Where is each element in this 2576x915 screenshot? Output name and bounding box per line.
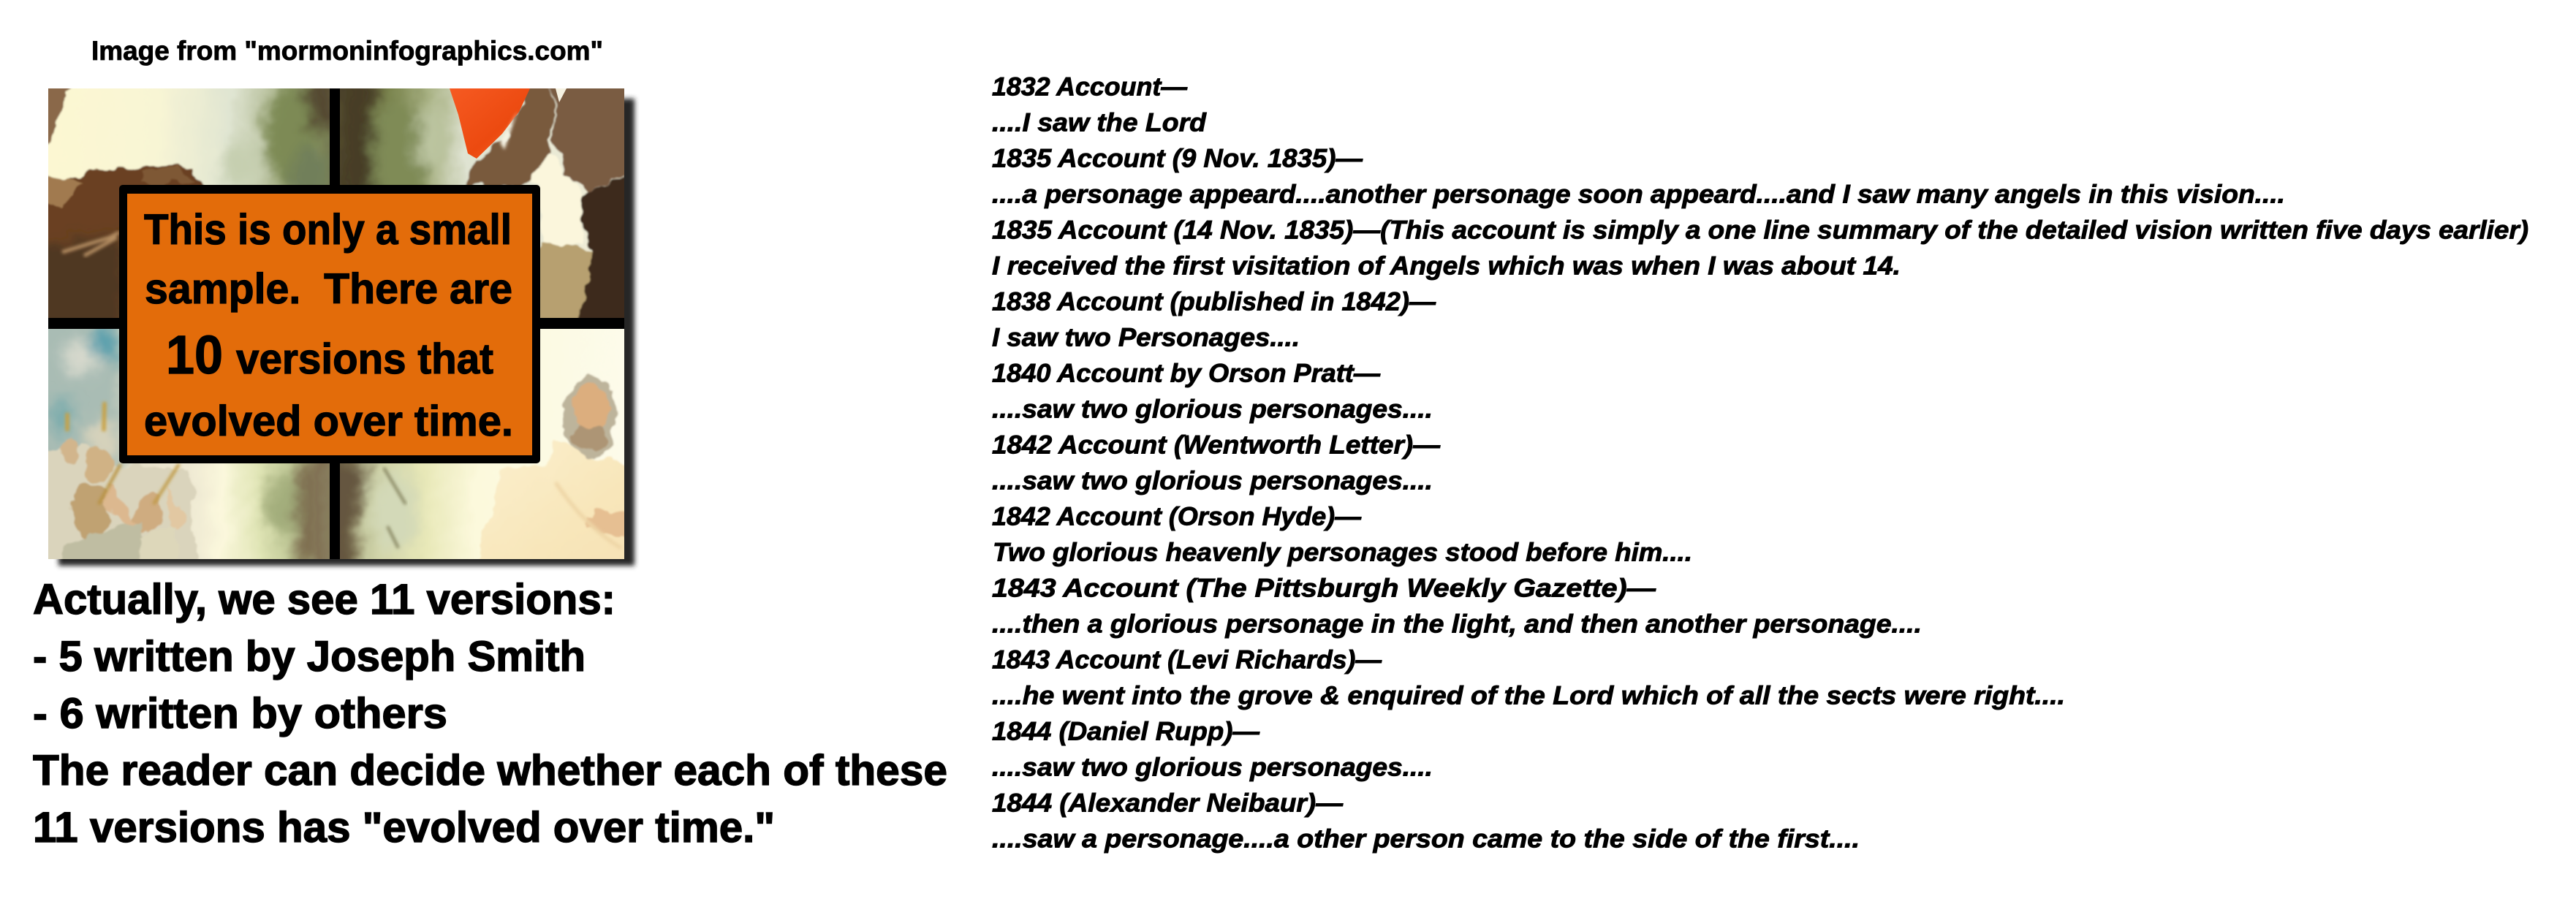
callout: orange box with black border bbox=[119, 185, 540, 463]
account 1844 Neibaur quote: ....saw a personage....a other person came to the side of the first.... bbox=[992, 824, 1860, 854]
summary line: reader decides: The reader can decide whether each of these bbox=[33, 747, 947, 794]
account 1844 Rupp heading: 1844 (Daniel Rupp)— bbox=[992, 718, 1260, 745]
account 1844 Rupp quote: ....saw two glorious personages.... bbox=[992, 753, 1433, 782]
callout text line 2: sample. There are bbox=[145, 265, 512, 313]
callout text line 3: 10 bbox=[166, 324, 223, 385]
summary line: by others: - 6 written by others bbox=[33, 690, 447, 737]
painting: flame and brown-robed figure bbox=[340, 88, 624, 318]
account 1842 Hyde quote: Two glorious heavenly personages stood before him.... bbox=[993, 538, 1692, 567]
callout text line 3: versions that bbox=[236, 335, 493, 383]
account 1835 Nov 14 heading: 1835 Account (14 Nov. 1835)—(This account is simply a one line summary of the detailed vision written five days earlier) bbox=[992, 216, 2528, 244]
account 1835 Nov 14 quote: I received the first visitation of Angels which was when I was about 14. bbox=[992, 251, 1901, 281]
account 1832 quote: ....I saw the Lord bbox=[992, 108, 1207, 137]
callout text line 1: This is only a small bbox=[144, 206, 512, 254]
account 1843 Richards heading: 1843 Account (Levi Richards)— bbox=[992, 646, 1382, 674]
account 1840 quote: ....saw two glorious personages.... bbox=[992, 395, 1433, 424]
account 1832 heading: 1832 Account— bbox=[992, 73, 1188, 101]
image credit line: Image from "mormoninfographics.com" bbox=[91, 36, 603, 66]
account 1842 Wentworth quote: ....saw two glorious personages.... bbox=[992, 466, 1433, 496]
account 1838 heading: 1838 Account (published in 1842)— bbox=[992, 288, 1436, 316]
account 1842 Wentworth heading: 1842 Account (Wentworth Letter)— bbox=[992, 431, 1441, 459]
account 1838 quote: I saw two Personages.... bbox=[992, 323, 1300, 352]
account 1843 Richards quote: ....he went into the grove & enquired of the Lord which of all the sects were right.... bbox=[992, 681, 2065, 710]
account 1835 Nov 9 heading: 1835 Account (9 Nov. 1835)— bbox=[992, 145, 1363, 172]
collage of four paintings with callout bbox=[29, 73, 643, 577]
account 1843 Gazette heading: 1843 Account (The Pittsburgh Weekly Gazette)— bbox=[992, 574, 1656, 602]
account 1843 Gazette quote: ....then a glorious personage in the light, and then another personage.... bbox=[992, 610, 1922, 639]
list of first vision accounts bbox=[992, 73, 2528, 854]
summary text block bbox=[33, 576, 947, 851]
painting: kneeling figure in grove bbox=[48, 88, 330, 318]
picture black frame grid bbox=[48, 88, 624, 559]
summary line: by Joseph Smith: - 5 written by Joseph Smith bbox=[33, 633, 586, 680]
callout text line 3 bbox=[166, 324, 493, 385]
callout text line 4: evolved over time. bbox=[144, 398, 513, 445]
painting: angels with trumpets bbox=[48, 329, 330, 559]
account 1842 Hyde heading: 1842 Account (Orson Hyde)— bbox=[992, 503, 1362, 531]
summary line: evolved over time: 11 versions has "evolved over time." bbox=[33, 804, 775, 851]
painting: robed Jesus figure bbox=[340, 329, 624, 559]
summary line: 11 versions: Actually, we see 11 versions: bbox=[33, 576, 615, 623]
account 1835 Nov 9 quote: ....a personage appeard....another personage soon appeard....and I saw many angels in this vision.... bbox=[992, 180, 2285, 209]
account 1844 Neibaur heading: 1844 (Alexander Neibaur)— bbox=[992, 789, 1344, 817]
picture drop shadow bbox=[58, 99, 634, 566]
account 1840 heading: 1840 Account by Orson Pratt— bbox=[992, 360, 1381, 387]
